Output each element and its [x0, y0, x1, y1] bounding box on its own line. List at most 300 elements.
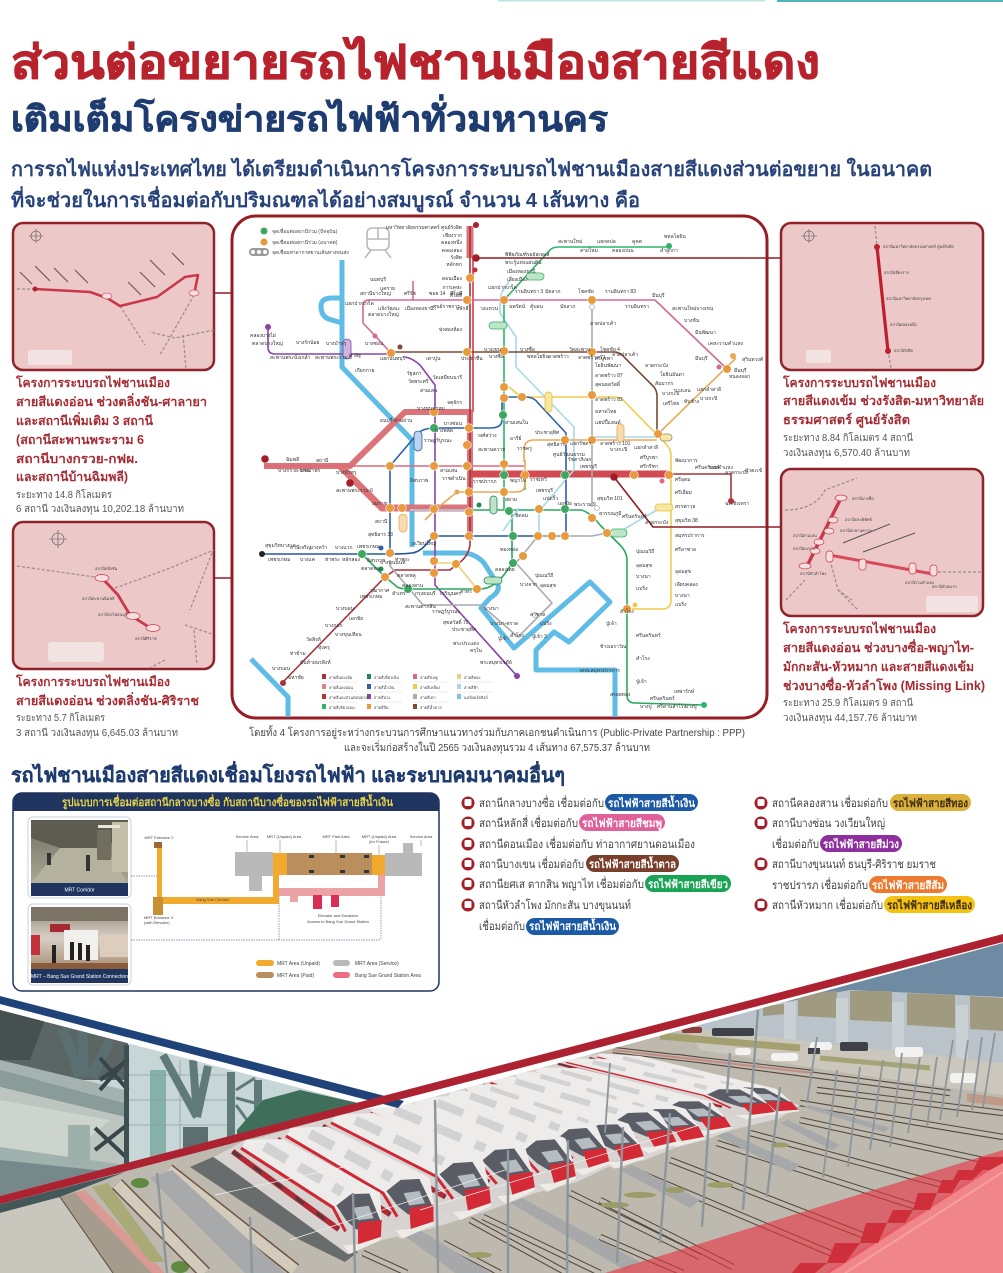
station labels: พระรู้แห่งแผ่นดิน [505, 259, 542, 266]
station labels: บางเขน [484, 347, 502, 353]
station labels: ประชาชื่น [461, 355, 483, 362]
floor plan legend: MRT Area (Service) [355, 961, 399, 967]
item: Bang Son Wongwian Yai connection [754, 816, 902, 852]
station labels: ราชดำเนิน [442, 475, 466, 482]
station labels: ฉะเชิงเทรา [725, 500, 749, 507]
station labels: รัชดาภิเษก [568, 456, 591, 463]
station labels: ปู่เจ้า 3 [532, 633, 547, 640]
station labels: สุคนธสวัสดิ์ [595, 380, 621, 388]
station labels: คลองบางไผ่ [250, 332, 276, 339]
text: project 4: ระยะทาง 25.9 กิโลเมตร 9 สถานี [783, 696, 913, 709]
station labels: แปดริ้ว [543, 493, 558, 502]
map legend: interchange types [249, 228, 349, 256]
text: project 3: โครงการระบบรถไฟชานเมือง [782, 375, 936, 390]
station labels: ศรีรัช [404, 290, 417, 297]
station labels: ศูนย์ราชการ [433, 303, 460, 310]
yard tracks [363, 1050, 1003, 1273]
title: ส่วนต่อขยายรถไฟชานเมืองสายสีแดง [11, 36, 820, 88]
map frame [232, 216, 767, 718]
line legend: สายสีชมพู [420, 675, 438, 681]
panel: map extension 2 Taling Chan - Siriraj: สถานีรถไฟธนบุรี [98, 612, 128, 618]
red tinted roof [605, 1150, 1003, 1273]
map legend: interchange types: จุดเชื่อมท่าอากาศยานเส้นทางขนส่ง [272, 249, 349, 256]
station labels: หัวตะเข้ [745, 467, 762, 474]
floor plan diagram: MRT Entrance 3 [144, 915, 174, 920]
train rows backing [225, 1050, 800, 1250]
station labels: โชคชัย [578, 288, 594, 295]
panel: map extension 3 Rangsit - Thammasat: สถานีคลองหนึ่ง [890, 322, 917, 327]
station labels: บางบอน [336, 606, 355, 612]
item: Yotse Taksin Phaya Thai connection [462, 875, 731, 892]
station labels: สำโรง [620, 608, 634, 615]
floor plan diagram: MRT (Unpaid) Area [362, 834, 397, 839]
item: Yotse Taksin Phaya Thai connection: รถไฟฟ้าสายสีเขียว [648, 877, 728, 891]
station labels: สรอยทอง [610, 692, 631, 698]
station labels: รามอินทรา 3 [515, 288, 543, 295]
station labels: มีนบุรี [695, 355, 708, 362]
station labels: มีนบุรี [734, 367, 747, 374]
text: project 4 [782, 621, 985, 724]
station labels: ทุ่งสองห้อง [439, 326, 463, 333]
panel: map extension 3 Rangsit - Thammasat [781, 223, 983, 370]
station labels: มีนบุรี [652, 292, 665, 299]
panel: map extension 4 Missing Link: สถานีหัวหมาก [932, 584, 957, 589]
item: Khlong San connection: รถไฟฟ้าสายสีทอง [893, 796, 968, 810]
map legend: interchange types: จุดเชื่อมต่อสถานีร่วม (ปัจจุบัน) [272, 228, 338, 235]
station labels: พญาไท [510, 477, 526, 484]
station labels: ลาดพร้าว 83 [595, 396, 623, 403]
text: project 4: โครงการระบบรถไฟชานเมือง [782, 621, 936, 636]
station labels: อิสรภาพ [367, 557, 385, 564]
text: project 2: 3 สถานี วงเงินลงทุน 6,645.03 ล้านบาท [16, 727, 178, 739]
station labels: ทุ่งครุ [318, 645, 330, 651]
text: project 1: สายสีแดงอ่อน ช่วงตลิ่งชัน-ศาลายา [16, 393, 207, 409]
station labels: บางปู [685, 704, 697, 710]
panel: map extension 4 Missing Link: สถานีบางซื่อ [852, 496, 874, 501]
text: project 1: และสถานีบ้านฉิมพลี) [16, 470, 128, 484]
station labels: ทีโอที [450, 290, 462, 297]
station labels: สามเสน [420, 388, 438, 394]
station labels: ศรีบูรพา [640, 454, 658, 461]
station labels: ลาดปลาเค้า [590, 320, 616, 327]
station labels: แฮปปี้แลนด์ [595, 417, 621, 426]
station labels: บางนา [484, 606, 499, 612]
station labels: แบริ่ง [675, 601, 687, 608]
icon: train [365, 228, 391, 258]
station labels: ปู่เจ้า [636, 678, 647, 685]
text: project 1 [15, 375, 207, 515]
yard greenery [131, 1142, 789, 1273]
station labels: บางเลน [674, 388, 691, 394]
station labels: บางปู [640, 704, 652, 710]
station labels: แยกปากเกร็ด [345, 299, 374, 307]
item: Bang Khen connection: สถานีบางเขน เชื่อมต่อกับ [479, 856, 584, 871]
station labels: ตลาดพลู [361, 566, 380, 572]
text: project 3: ระยะทาง 8.84 กิโลเมตร 4 สถานี [783, 431, 913, 444]
station labels: สะพานพระราม 6 [336, 488, 373, 494]
station labels: บางรักน้อย [296, 339, 320, 346]
station labels: คู้บอน [530, 303, 544, 310]
line legend: สายสีเทา [420, 695, 436, 700]
station labels: บางแค [300, 557, 315, 563]
item: Hua Lamphong Makkasan Bang Khun Non connection: รถไฟฟ้าสายสีน้ำเงิน [529, 918, 616, 933]
station labels: ปุณณวิถี [535, 572, 553, 579]
station labels: แยกรัชดา [570, 441, 592, 447]
station labels: วุฒากาศ [370, 588, 390, 594]
station labels: นพรัตน์ [509, 303, 526, 310]
list: connections left column [462, 794, 731, 935]
station labels: เมืองทองธานี [405, 305, 434, 312]
station labels: ปุณณวิถี [636, 548, 654, 555]
station labels: สะพานใหม่บางเขน [672, 305, 714, 312]
item: Khlong San connection: สถานีคลองสาน เชื่อมต่อกับ [772, 795, 888, 810]
station labels: สามเสนใน [505, 419, 529, 426]
station labels: ศรีลาซาล [675, 546, 696, 553]
connector: panel 1 to map [214, 293, 265, 459]
station labels: รัฐสภา [407, 371, 422, 377]
station labels: พระสมุทรเจดีย์ [480, 659, 512, 666]
map legend: interchange types: จุดเชื่อมต่อสถานีร่วม (อนาคต) [272, 239, 338, 246]
map caption [249, 725, 745, 754]
connectors: right panels [476, 258, 781, 527]
station labels: คลองหนึ่ง [441, 239, 463, 246]
station labels: เลียบคลอง [675, 581, 698, 588]
station labels: พหลโยธิน [527, 353, 549, 360]
line legend: สายสีเขียวเข้ม [374, 675, 399, 680]
station labels: บางกรวย-กฟผ. [278, 468, 310, 474]
station labels: วงศ์สว่าง [477, 432, 497, 439]
station labels: บางซ่อน [365, 341, 384, 347]
station labels: อุดมสุข [540, 583, 556, 589]
station labels: ราชครู [517, 446, 532, 452]
text: project 1: โครงการระบบรถไฟชานเมือง [15, 375, 170, 390]
station labels: รามอินทรา [625, 303, 649, 310]
green interchange stations [358, 411, 569, 593]
station labels: ราษฎร์บูรณะ [432, 608, 460, 615]
station labels: แยกลำสาลี [634, 444, 658, 451]
station labels: ลาดกระบัง [645, 520, 669, 526]
text: project 1: (สถานีสะพานพระราม 6 [16, 433, 144, 447]
station labels: ลาดพร้าว [548, 353, 569, 360]
station labels: บางซื่อ [489, 353, 504, 360]
station labels: สะพานควาย [478, 447, 505, 453]
panel header: รูปแบบการเชื่อมต่อสถานีกลางบางซื่อ กับสถานีบางซื่อของรถไฟฟ้าสายสีน้ำเงิน [62, 794, 393, 810]
station labels: ศรีบูรพา [595, 355, 613, 362]
interchange capsules [343, 273, 673, 584]
panel: central network map [232, 216, 781, 718]
station labels: ศรีนครินทร์ [695, 464, 720, 471]
intro text [11, 157, 932, 214]
station labels: บางนา-ตราด [490, 621, 518, 627]
station labels: แยกนนทบุรี [380, 355, 405, 362]
station labels: วัดพระศรี [408, 378, 429, 385]
panel: map extension 3 Rangsit - Thammasat: สถานีมหาวิทยาลัยธรรมศาสตร์ ศูนย์รังสิต [883, 244, 954, 250]
station labels: มหาดไทย [595, 408, 616, 415]
station labels: เพชรเกษม [268, 557, 290, 563]
panel: map extension 1 Taling Chan - Salaya [13, 223, 214, 370]
station labels: หลักหก [446, 262, 462, 268]
station labels: พิพิธภัณฑ์รอยัลเจมส์ [505, 251, 549, 258]
intro text: การรถไฟแห่งประเทศไทย ได้เตรียมดำเนินการโครงการระบบรถไฟชานเมืองสายสีแดงส่วนต่อขยาย ในอนาคต [11, 157, 932, 181]
item: Lak Si connection [462, 814, 665, 831]
thick highlighted extension routes [264, 226, 671, 540]
station labels: ท่าพระ [325, 557, 340, 563]
station labels: แบริ่ง [636, 585, 648, 592]
item: Bang Son Wongwian Yai connection: เชื่อมต่อกับ [772, 836, 819, 851]
station labels: เจริญนคร [440, 590, 461, 597]
station labels: เพชรเกษม [357, 544, 379, 550]
item: Bang Khun Non Thonburi-Siriraj Yommarat connection: ราชปรารภ เชื่อมต่อกับ [772, 877, 868, 892]
photo: red line train depot [0, 940, 1003, 1273]
station labels: แยกคปอ [597, 239, 616, 245]
station labels: สยาม [505, 497, 517, 503]
floor plan diagram: Service Area [410, 834, 433, 839]
overhead wires [215, 1125, 700, 1240]
text: project 4: วงเงินลงทุน 44,157.76 ล้านบาท [783, 712, 917, 724]
station labels: เกียกกาย [355, 367, 375, 374]
station labels: ลำลูกกา [660, 248, 678, 254]
station labels: สถานีบางใหญ่ [360, 290, 391, 297]
station labels: เคหะสมุทรปราการ [579, 668, 620, 674]
intro text: ที่จะช่วยในการเชื่อมต่อกับปริมณฑลได้อย่างสมบูรณ์ จำนวน 4 เส้นทาง คือ [11, 185, 640, 214]
photo: MRT to Bang Sue Grand Station connection: MRT – Bang Sue Grand Station Connection [31, 974, 128, 980]
station labels: ราชเทวี [530, 476, 547, 483]
station labels: พัฒนาการ [675, 458, 698, 464]
floor plan legend [256, 960, 421, 979]
list: connections right column [754, 794, 975, 913]
station labels: กรุงธนบุรี [415, 590, 436, 597]
item: Bang Khun Non Thonburi-Siriraj Yommarat connection [754, 857, 947, 893]
top edge strip [498, 0, 1003, 2]
station labels: ศรีอุดม [675, 476, 690, 483]
station labels: ลาดพร้าว 87 [595, 372, 623, 379]
station labels: สมุทรปราการ [675, 533, 705, 539]
station labels: แยกลำสาลี [697, 386, 721, 393]
text: project 3: สายสีแดงเข้ม ช่วงรังสิต-มหาวิทยาลัย [783, 394, 984, 408]
item: Krung Thep Aphiwat connection: สถานีกลางบางซื่อ เชื่อมต่อกับ [479, 795, 604, 810]
station labels: ศรีเอี่ยม [675, 489, 692, 496]
station labels: บางแวก [335, 545, 352, 551]
line legend: สายสีทอง [464, 675, 481, 680]
station labels: หลักสอง [342, 557, 360, 563]
connector dots [261, 254, 618, 487]
station labels: แบริ่ง [540, 620, 552, 627]
station labels: สรรพาวุธ [675, 504, 695, 510]
text: project 3 [782, 375, 984, 459]
station labels: ทองหล่อ [500, 547, 518, 553]
station labels: พันท้ายนรสิงห์ [300, 659, 331, 666]
item: Krung Thep Aphiwat connection [462, 794, 698, 811]
station labels: มัยลาภ [545, 289, 560, 295]
floor plan diagram: MRT (Unpaid) Area [267, 834, 302, 839]
station labels: วัดสิงห์ [306, 636, 321, 643]
text: project 2 [15, 674, 200, 739]
station labels: ท่าอิฐ [349, 352, 361, 359]
station labels: สำเหร่ [392, 591, 406, 597]
station labels: ลาซาล [530, 612, 545, 618]
map caption: โดยทั้ง 4 โครงการอยู่ระหว่างกระบวนการศึกษาแนวทางร่วมกับภาคเอกชนดำเนินการ (Public-Private Partnership : PPP) [249, 725, 745, 739]
map caption: และจะเริ่มก่อสร้างในปี 2565 วงเงินลงทุนรวม 4 เส้นทาง 67,575.37 ล้านบาท [344, 740, 650, 754]
station labels: โยธินอันดา [660, 371, 685, 378]
station labels [250, 224, 764, 710]
panel header [13, 793, 439, 811]
item: Bang Son Wongwian Yai connection: สถานีบางซ่อน วงเวียนใหญ่ [772, 817, 885, 830]
text: project 2: สายสีแดงอ่อน ช่วงตลิ่งชัน-ศิริราช [16, 692, 200, 708]
item: Hua Mak connection: สถานีหัวหมาก เชื่อมต่อกับ [772, 897, 883, 912]
station labels: สถานี [375, 518, 388, 525]
text: project 2: โครงการระบบรถไฟชานเมือง [15, 674, 170, 689]
station labels: บางนา [675, 593, 690, 599]
station labels: สุวรรณภูมิ [599, 510, 621, 517]
line legend: แอร์พอร์ตลิงก์ [464, 695, 488, 700]
station labels: ศรีด่านสำโรง [657, 703, 687, 710]
station labels: มหาชัย [288, 675, 304, 681]
item: Bang Khen connection [462, 855, 679, 872]
transit lines [262, 226, 736, 705]
text: project 4: สายสีแดงอ่อน ช่วงบางซื่อ-พญาไท- [783, 639, 974, 655]
station labels: เมืองทองธานี [507, 268, 536, 275]
station labels: ราชปรารภ [473, 479, 497, 485]
station labels: เชียงราก [443, 232, 462, 239]
floor plan legend: MRT Area (Unpaid) [277, 961, 320, 967]
diagonal stripe: red [0, 934, 1003, 1204]
panel: map extension 3 Rangsit - Thammasat: สถานีเชียงราก [884, 270, 910, 275]
station labels: ธนบุรี-สามย่าน [380, 417, 413, 424]
photo: MRT corridor [28, 817, 131, 898]
station labels: บางซ่อน [444, 421, 463, 427]
orange interchange stations [381, 274, 731, 613]
station labels: สุขุมวิท 101 [597, 495, 623, 502]
station labels: คลองสอง [442, 248, 463, 254]
station labels: ยมราช [372, 501, 388, 507]
station labels: วงเวียนใหญ่ [410, 540, 436, 547]
station labels: เพชรบุรี [536, 487, 553, 494]
station labels: ปู่เจ้า [606, 620, 617, 627]
item: Don Mueang connection: สถานีดอนเมือง เชื่อมต่อกับ ท่าอากาศยานดอนเมือง [479, 836, 695, 851]
station labels: บางขุนเทียน [335, 631, 362, 638]
item: Bang Khun Non Thonburi-Siriraj Yommarat connection: สถานีบางขุนนนท์ ธนบุรี-ศิริราช ยมราช [772, 857, 936, 871]
station labels: วัดเสมียนนารี [433, 374, 462, 381]
line legend: สายสีน้ำเงิน [374, 683, 395, 690]
photo: MRT to Bang Sue Grand Station connection [28, 904, 131, 985]
station labels: ประชาอุทิศ [535, 429, 560, 436]
item: Don Mueang connection [462, 836, 695, 851]
item: Hua Lamphong Makkasan Bang Khun Non connection: สถานีหัวลำโพง มักกะสัน บางขุนนนท์ [479, 898, 631, 912]
station labels: ศรีนครินทร์ [622, 513, 647, 520]
panel: map extension 4 Missing Link [781, 469, 983, 616]
station labels: สุขุมวิท 38 [675, 517, 698, 524]
station labels: เพชรเกษม [360, 594, 382, 600]
item: Bang Khun Non Thonburi-Siriraj Yommarat connection: รถไฟฟ้าสายสีส้ม [872, 878, 944, 892]
line legend: สายสีม่วง [374, 695, 390, 700]
panel: map extension 2 Taling Chan - Siriraj [13, 522, 214, 669]
line legend: สายสีแดงเข้ม [329, 675, 353, 680]
station labels: ราษฎร์บูรณะ [424, 437, 452, 444]
text: project 3: วงเงินลงทุน 6,570.40 ล้านบาท [783, 447, 910, 459]
station labels: บางหว้า [310, 544, 328, 551]
station labels: เทพารักษ์ [674, 688, 695, 695]
station labels: คูคต [632, 239, 642, 245]
station labels: แคราย [380, 286, 395, 292]
station labels: ศรีนครินทร์ [650, 695, 675, 702]
station labels: สายไหม [580, 247, 598, 254]
line legend: สายสีฟ้า [464, 685, 479, 690]
connector: panel 2 to map [214, 484, 350, 578]
station labels: ทับช้าง [684, 398, 700, 405]
floor plan diagram: (with Elevator) [144, 920, 170, 925]
station labels: ทีโอที [450, 292, 462, 299]
station labels: อุดมสุข [636, 563, 652, 569]
station labels: บางชัน [684, 318, 700, 324]
item: Bang Son Wongwian Yai connection: รถไฟฟ้าสายสีม่วง [823, 837, 899, 851]
station labels: เสรีไทย [663, 400, 679, 407]
floor plan diagram: MRT Entrance 2 [145, 835, 174, 840]
station labels: ช้างเอราวัณ [600, 643, 627, 650]
panel: map extension 2 Taling Chan - Siriraj: สถานีศิริราช [135, 636, 157, 641]
station labels: บางซื่อ [520, 346, 535, 353]
station labels: โยธินพัฒนา [595, 362, 621, 369]
line terminal markers [259, 222, 736, 708]
panel: map extension 4 Missing Link: สถานีสะพานควาย [840, 528, 872, 533]
station labels: สะพานตากสิน [405, 603, 436, 610]
station labels: หนองจอก [729, 374, 750, 380]
text: project 2: ระยะทาง 5.7 กิโลเมตร [16, 711, 106, 724]
station labels: เตาปูน [426, 356, 441, 362]
text: project 4: ช่วงบางซื่อ-หัวลำโพง (Missing Link) [783, 677, 985, 693]
text: project 3: ธรรมศาสตร์ ศูนย์รังสิต [783, 412, 910, 428]
station labels: บางนา [636, 574, 651, 580]
station labels: ศรีนครินทร์ [636, 632, 661, 639]
station labels: มัยลาภ [560, 304, 575, 310]
station labels: บางกอก [325, 623, 342, 629]
station labels: ตลาดพลู [397, 573, 416, 579]
station labels: รังสิต [451, 254, 462, 261]
station labels: สถานี [316, 457, 329, 464]
station labels: ลาดพร้าว 101 [600, 440, 631, 447]
station labels: บางจาก [520, 582, 537, 588]
item: Khlong San connection [754, 794, 971, 811]
station labels: มีนพัฒนา [695, 329, 716, 336]
panel: Bang Sue connection floor plan [13, 793, 439, 991]
station labels: สะพานใหม่ [558, 238, 582, 245]
station labels: อารีย์ [510, 435, 521, 442]
floor plan diagram [131, 834, 433, 940]
station labels: พระประแดง [453, 641, 480, 647]
station labels: มหาวิทยาลัยธรรมศาสตร์ ศูนย์รังสิต [386, 224, 462, 231]
station labels: บางพลัด [435, 428, 453, 434]
item: Hua Mak connection [754, 896, 975, 913]
station labels: สำโรง [510, 632, 524, 639]
floor plan diagram: (for Future) [369, 839, 390, 844]
station labels: เคหะรามคำแหง [708, 341, 743, 347]
station labels: บางอำพร [300, 468, 321, 474]
station labels: สาทร [460, 589, 472, 595]
station labels: แยกปากเกร็ด [488, 283, 517, 291]
line legend: สายสีแดงส่วนต่อขยาย [329, 695, 368, 700]
station labels: พหลโยธิน [664, 233, 686, 240]
floor plan diagram: Service Area [236, 834, 259, 839]
station labels: ลาดปลาเค้า [612, 351, 638, 358]
line legend: สายสีแดงอ่อน [329, 685, 353, 690]
station labels: ครุใน [470, 647, 482, 654]
photo: MRT corridor: MRT Corridor [64, 888, 95, 894]
line legend: สายสีส้ม [374, 705, 389, 710]
floor plan diagram: Access to Bang Sue Grand Station [307, 919, 369, 924]
subtitle: เติมเต็มโครงข่ายรถไฟฟ้าทั่วมหานคร [11, 94, 608, 139]
station labels: จตุจักร [447, 400, 462, 406]
text: project 1: ระยะทาง 14.8 กิโลเมตร [16, 488, 113, 501]
station labels: ลาดกระบัง [725, 470, 749, 476]
